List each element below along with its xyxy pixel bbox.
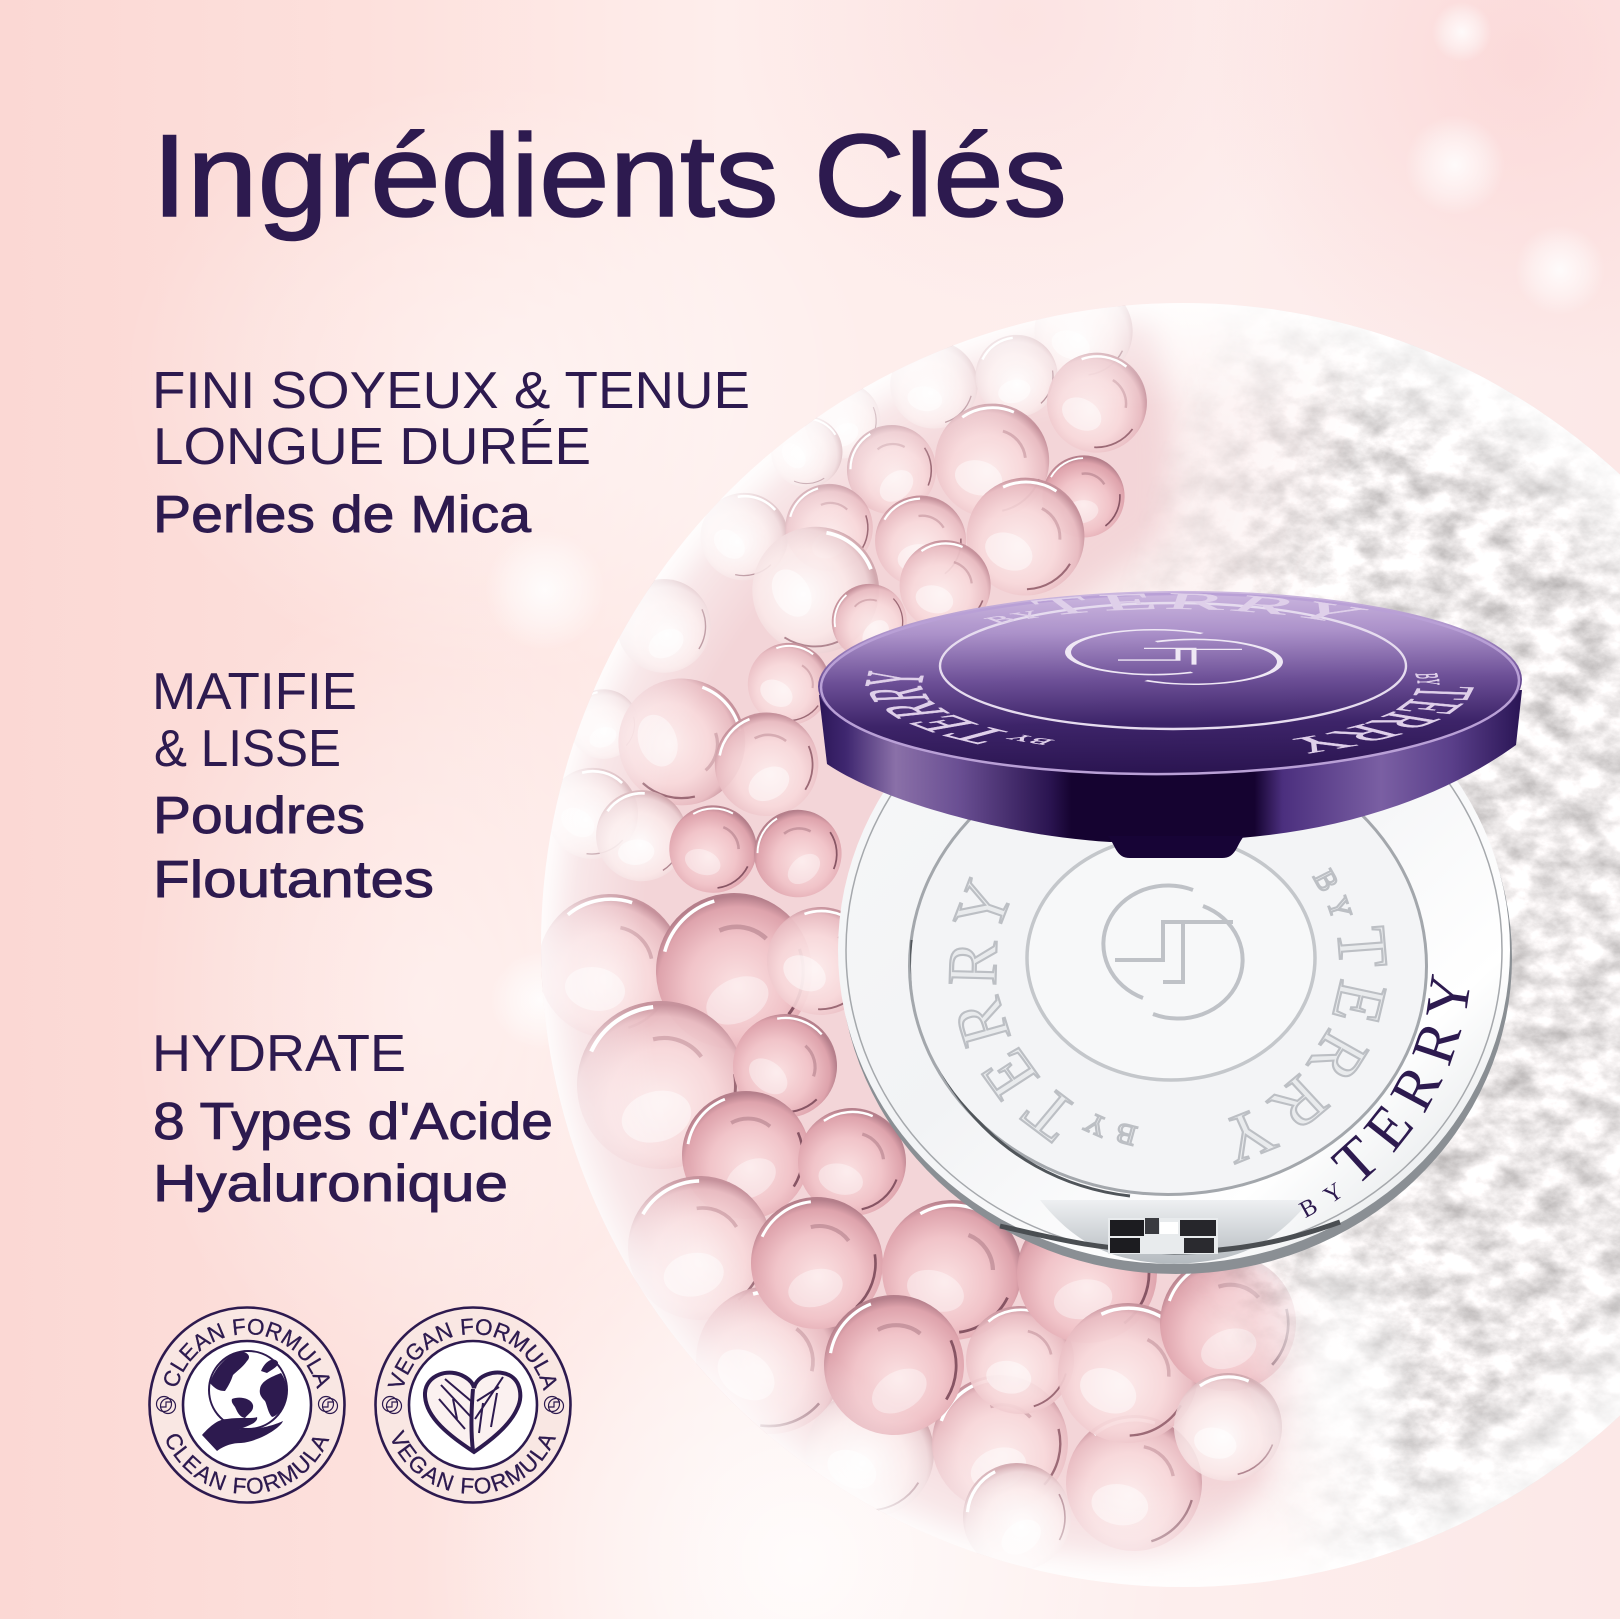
product: compact base bbox=[838, 780, 1512, 1274]
powder texture bbox=[1160, 330, 1620, 1548]
hinge bbox=[1000, 1218, 1340, 1254]
icon: globe in hand bbox=[202, 1351, 287, 1451]
badge: clean formula bbox=[148, 1306, 346, 1504]
hinge plate bbox=[1040, 1200, 1310, 1264]
text block: fini soyeux bbox=[152, 362, 750, 544]
lid logo bbox=[1068, 630, 1280, 684]
badge: vegan formula: VEGAN FORMULA bbox=[387, 1318, 557, 1392]
bubbles: mica pearls, lower bbox=[527, 867, 1315, 1592]
text block: hydrate bbox=[152, 1025, 553, 1213]
embossed pan lettering bbox=[948, 867, 1388, 1165]
lid tab bbox=[1108, 836, 1244, 858]
badge: clean formula: CLEAN FORMULA bbox=[166, 1434, 330, 1494]
lid lettering bbox=[865, 593, 1474, 754]
text block: hydrate: Hyaluronique bbox=[153, 1155, 508, 1213]
badge: vegan formula: VEGAN FORMULA bbox=[392, 1429, 556, 1494]
lid lettering: BYTERRY bbox=[865, 670, 1055, 745]
white haze between bubbles and powder bbox=[1254, 1274, 1410, 1502]
compact metal ring bbox=[838, 636, 1510, 1264]
rim fade bbox=[530, 295, 1620, 1595]
bubbles: mica pearls, upper bbox=[529, 268, 1165, 915]
icon: leaf heart bbox=[425, 1373, 520, 1452]
compact shell shadow edge bbox=[840, 642, 1512, 1274]
lid inner ring bbox=[940, 603, 1406, 729]
lid top face bbox=[817, 587, 1523, 779]
badge: vegan formula bbox=[374, 1306, 572, 1504]
text block: hydrate: 8 Types d'Acide bbox=[153, 1093, 553, 1151]
text block: fini soyeux: Perles de Mica bbox=[153, 486, 531, 544]
metal lettering: by terry: BYTERRY bbox=[1298, 974, 1470, 1218]
text block: fini soyeux: FINI SOYEUX & TENUE bbox=[152, 362, 750, 420]
text block: matifie: & LISSE bbox=[154, 720, 341, 778]
big circle: bubbles and powder bbox=[527, 268, 1620, 1595]
powder pan bbox=[911, 739, 1425, 1193]
embossed pan lettering: BYTERRY bbox=[948, 876, 1139, 1146]
title: Ingrédients Clés bbox=[152, 110, 1067, 241]
text block: matifie: Poudres bbox=[153, 787, 365, 845]
lid lettering: BY TERRY bbox=[1292, 673, 1474, 754]
badge: clean formula: CLEAN FORMULA bbox=[164, 1318, 330, 1390]
embossed pan lettering: BYTERRY bbox=[1228, 867, 1388, 1165]
text block: matifie: MATIFIE bbox=[152, 663, 357, 721]
text block: fini soyeux: LONGUE DURÉE bbox=[153, 418, 591, 476]
text block: hydrate: HYDRATE bbox=[152, 1025, 406, 1083]
lid lettering: BYTERRY bbox=[984, 593, 1369, 624]
text block: matifie: Floutantes bbox=[153, 851, 434, 909]
embossed logo bbox=[1103, 885, 1243, 1019]
product: purple lid bbox=[818, 590, 1522, 858]
lid side band bbox=[819, 690, 1522, 842]
bubble base tint bbox=[547, 310, 1312, 1561]
text block: matifie bbox=[152, 663, 434, 909]
